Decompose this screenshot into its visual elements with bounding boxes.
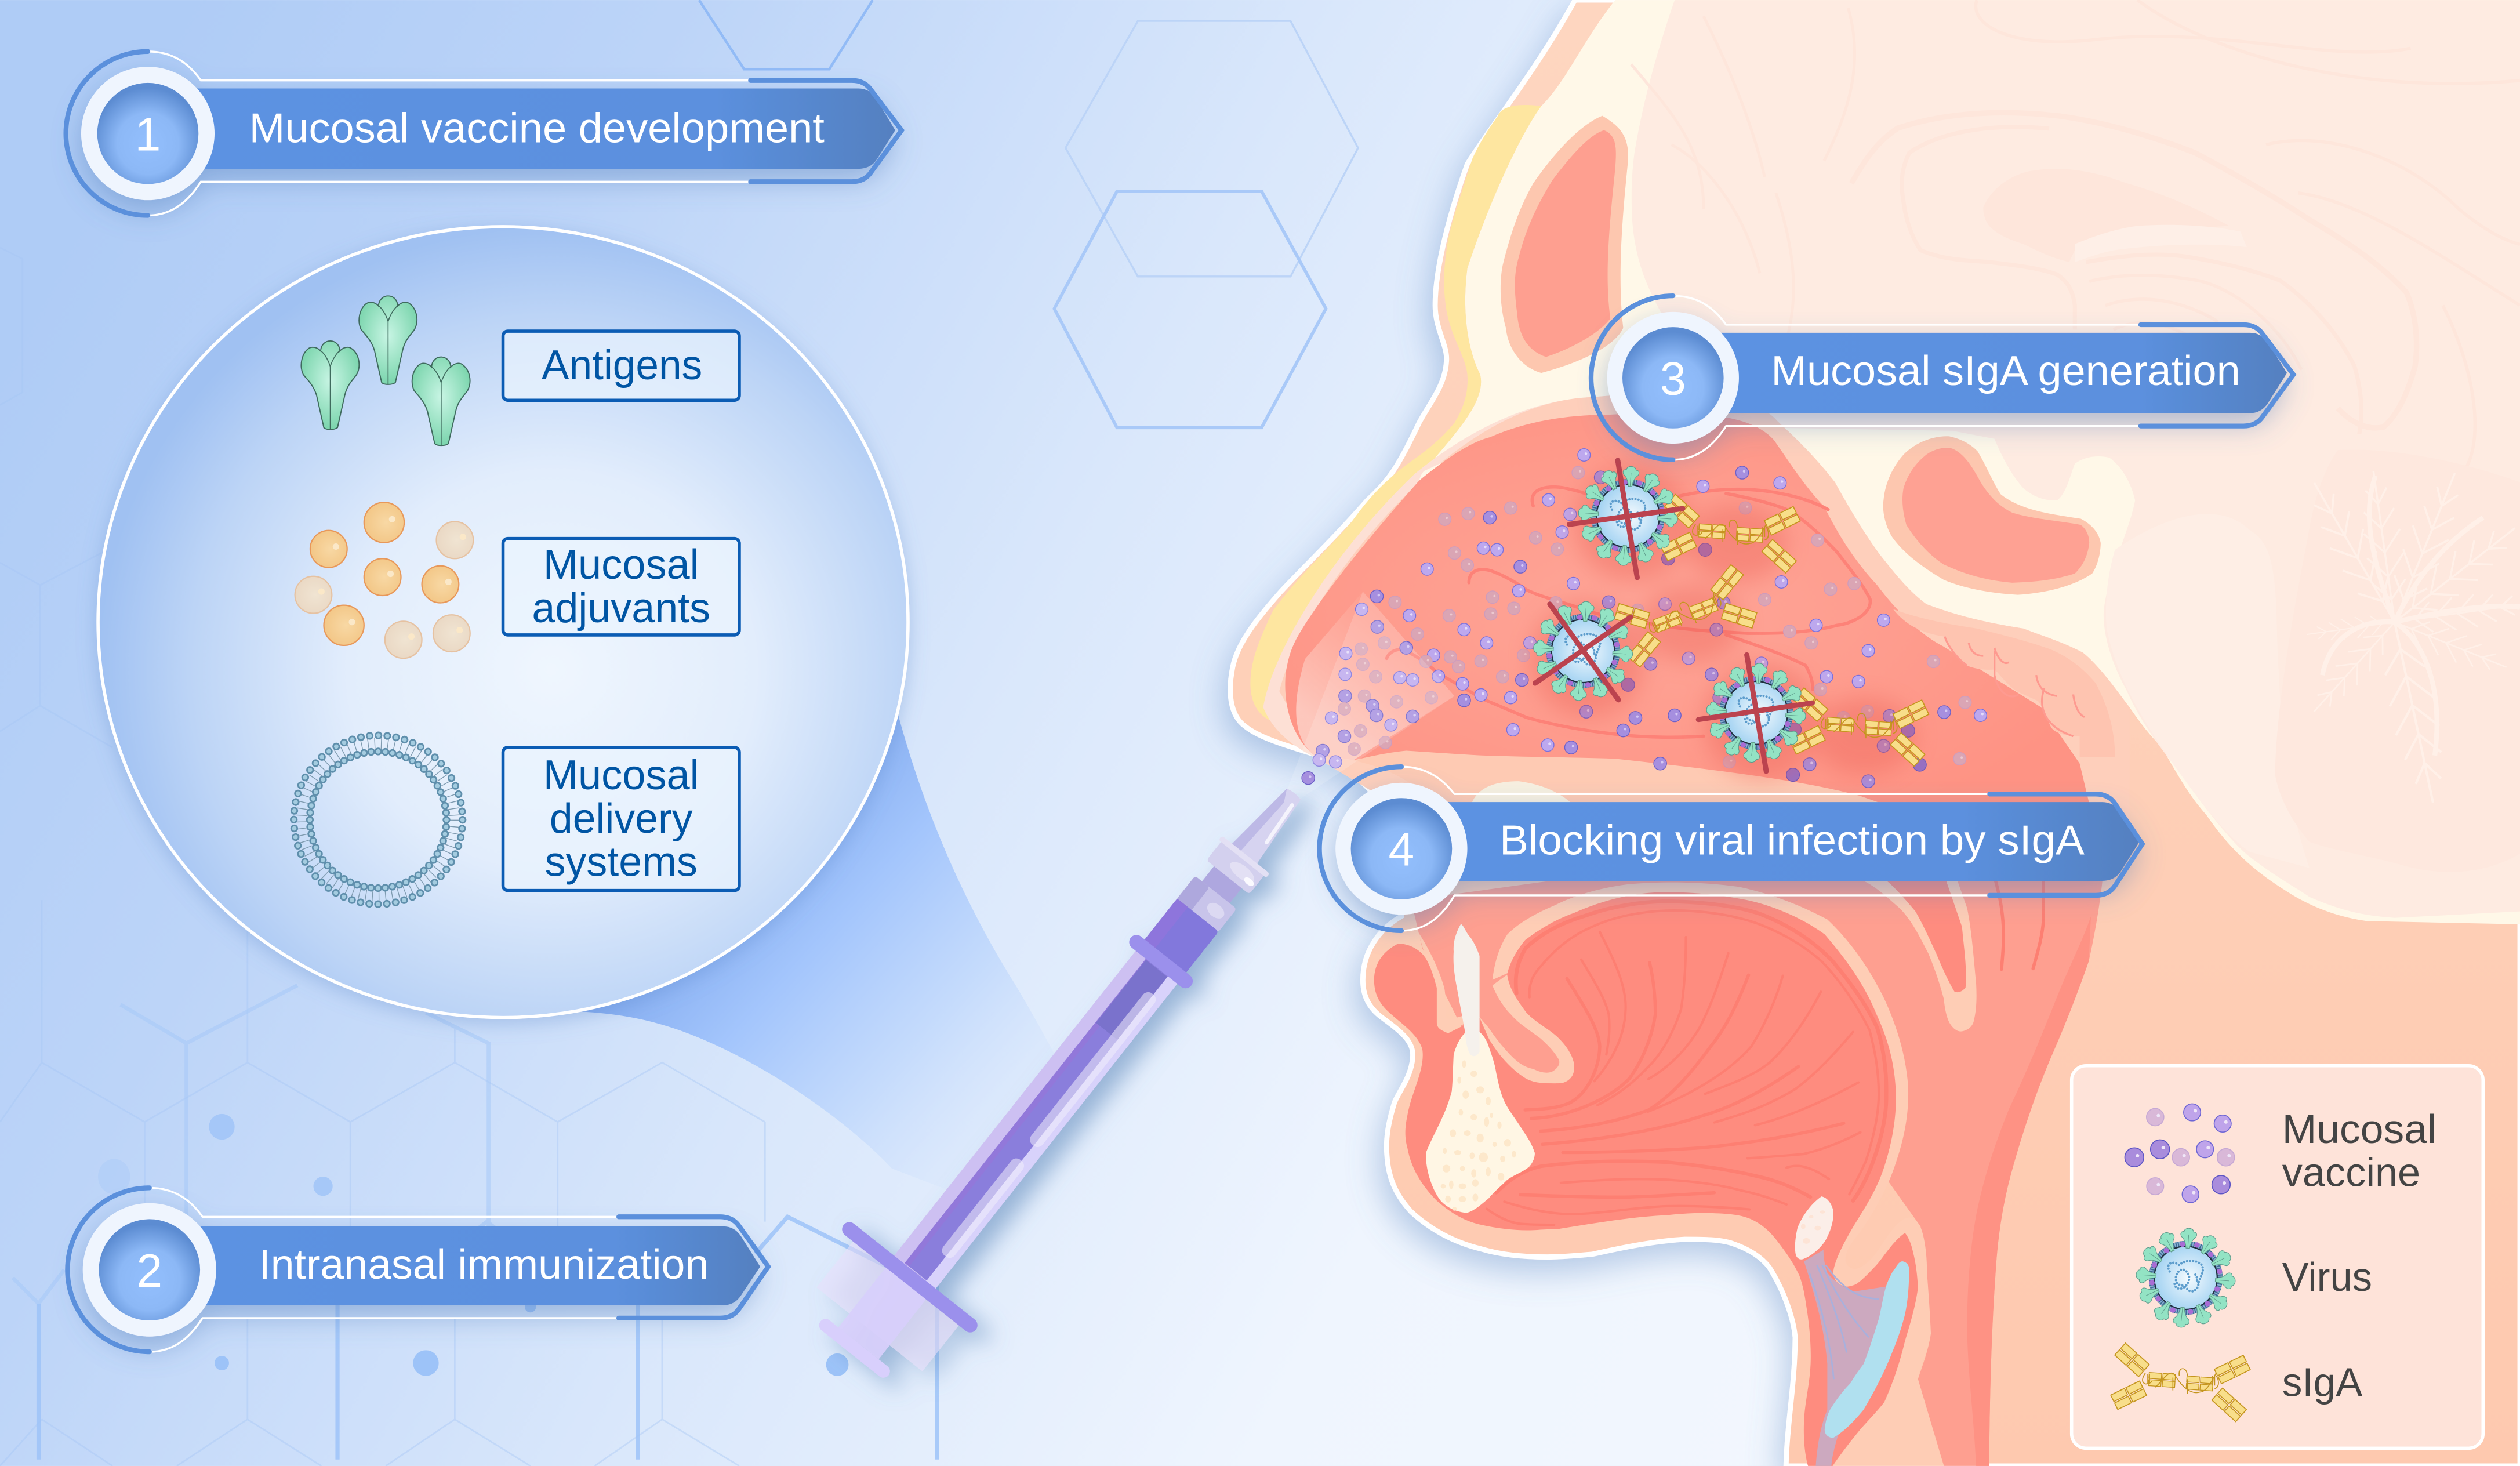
syringe main flange [839,1219,981,1336]
badge 3: Mucosal sIgA generation: Mucosal sIgA generation [1771,348,2241,394]
frontal sinus inner [1515,130,1616,357]
nasal outer band [1263,394,2129,868]
nostril pale zone [1296,592,1454,760]
label: antigens: Antigens [542,342,702,389]
particle at nozzle [1302,772,1315,785]
epiglottis [1795,1196,1833,1260]
circle [98,227,908,1018]
sphenoid sinus [1883,436,2101,595]
label: adjuvants: adjuvants [532,585,710,632]
badge 3: Mucosal sIgA generation: 3 [1660,353,1686,405]
legend text: sIgA: sIgA [2282,1359,2363,1405]
head silhouette [1230,0,2520,1466]
brain [1632,0,2520,918]
skull bone [1424,0,2520,924]
icon: virus [2136,1228,2236,1328]
syringe plunger [805,1241,959,1385]
nasal cavity [1285,413,2089,804]
badge 1: Mucosal vaccine development [66,52,902,216]
badge 4: Blocking viral infection by sIgA [1320,767,2143,931]
legend box [2072,1066,2483,1448]
legend text: mucosal vaccine [2282,1106,2437,1195]
larynx membrane [1804,1250,1890,1466]
brain stem [2106,514,2310,868]
spray cone [1287,592,1454,799]
badge 4: Blocking viral infection by sIgA: Blocking viral infection by sIgA [1499,817,2085,863]
panel: head anatomy [1230,0,2520,1466]
syringe hub [1176,876,1237,932]
palate bone [1472,781,1639,852]
label: antigens [503,331,739,400]
syringe [784,740,1360,1405]
label: delivery systems [503,747,739,891]
panel: magnified components circle [98,227,908,1018]
tongue muscle lines [1487,901,1886,1225]
icon: mucosal vaccine particles [2125,1104,2235,1203]
legend text: virus: Virus [2282,1254,2372,1300]
tongue and jaw tissue [1374,892,1918,1466]
label: adjuvants: Mucosal [543,542,699,588]
tongue and epiglottis band [1493,883,1944,1466]
brain folds [1631,0,2520,466]
background hexagon pattern [0,0,1358,1466]
badge 2: Intranasal immunization [67,1188,768,1352]
icon: antigens [301,296,470,445]
syringe neck [1200,863,1244,906]
nasal tissue band [1279,394,2129,868]
icon: adjuvants [295,502,473,658]
frontal sinus [1501,116,1628,373]
pharynx lines [1996,881,2043,969]
badge 3: Mucosal sIgA generation [1591,296,2293,460]
blocked virus 2 [1533,551,1766,701]
badge 4: Blocking viral infection by sIgA: 4 [1389,824,1414,876]
soft palate stripe [1864,881,1977,1032]
icon: sIgA [2111,1343,2250,1421]
cerebellum [2275,449,2520,872]
blocked virus 1 [1570,460,1800,578]
adenoid lobes [1893,609,2115,757]
badge 1: Mucosal vaccine development: Mucosal vaccine development [249,105,825,151]
badge 1: Mucosal vaccine development: 1 [135,108,161,161]
badge 2: Intranasal immunization: Intranasal immunization [259,1242,709,1288]
panel: legend [2072,1066,2483,1448]
cream tip [1419,441,1490,491]
syringe nozzle [1231,782,1306,865]
airway [1825,1261,1909,1438]
callout wedge linking circle to syringe [531,691,1157,1270]
legend text: mucosal vaccine: vaccine [2282,1150,2420,1195]
syringe barrel [889,898,1219,1294]
syringe thumb rest [816,1316,892,1380]
lip pocket band [1418,932,1574,1083]
icon: liposome delivery system [294,735,463,904]
palate band [1353,750,1929,820]
label: delivery systems: Mucosal [543,752,699,799]
syringe collar [1204,836,1270,896]
blocked virus 3 [1698,655,1929,771]
nasal cartilage [1250,105,1541,722]
pharynx column [1411,804,2106,1466]
label: adjuvants [503,539,739,635]
sphenoid sinus inner [1902,448,2089,583]
legend text: mucosal vaccine: Mucosal [2282,1106,2437,1152]
vaccine particles [1313,449,1987,788]
larynx fibres [1809,1265,1879,1379]
soft palate [1887,881,1966,992]
syringe finger flange [1126,932,1196,991]
badge 2: Intranasal immunization: 2 [136,1245,162,1297]
virus glow [1530,466,1916,779]
jaw bone [1426,1032,1535,1213]
pharynx outer band [1967,916,2091,1466]
label: delivery systems: systems [545,839,698,886]
tooth [1454,924,1480,1056]
label: delivery systems: delivery [550,796,693,842]
turbinate curves [1386,487,1870,737]
